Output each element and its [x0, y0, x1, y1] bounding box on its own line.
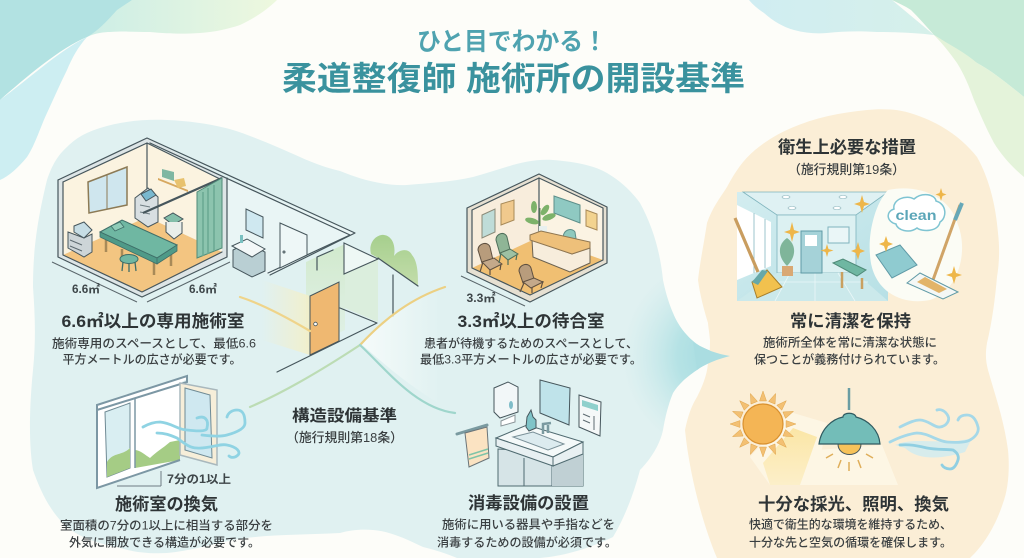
mop — [907, 203, 962, 299]
illustration: wash basin and disinfection — [457, 380, 601, 486]
waiting chairs — [478, 233, 543, 293]
text block: light and ventilation: 快適で衛生的な環境を維持するため、 — [749, 516, 952, 532]
panel: hygiene measures background — [685, 109, 1009, 558]
hand soap — [526, 410, 536, 431]
decorative blob: top left pale cyan — [0, 37, 87, 180]
title: ひと目でわかる！ — [417, 28, 607, 56]
decorative blob: top left teal — [0, 0, 132, 100]
exterior window — [344, 243, 378, 274]
text block: keep clean: 施術所全体を常に清潔な状態に — [763, 334, 937, 350]
decorative blob: top right light green — [934, 35, 1024, 177]
gold sparkles — [784, 188, 962, 284]
door — [310, 282, 339, 355]
dimension lines — [52, 262, 230, 302]
basin counter — [496, 425, 583, 466]
air flow — [890, 410, 978, 469]
text block: keep clean: 保つことが義務付けられています。 — [754, 352, 945, 366]
treatment machine — [135, 188, 158, 227]
text block: treatment room — [52, 312, 256, 366]
connector lines: hub to four items — [240, 287, 455, 413]
text block: disinfection: 施術に用いる器具や手指などを — [442, 516, 615, 532]
wall art — [482, 196, 597, 238]
text block: keep clean: 常に清潔を保持 — [790, 312, 911, 331]
small stool — [164, 213, 183, 239]
interior door — [280, 223, 307, 268]
text block: waiting room — [420, 312, 642, 366]
text block: treatment room: 6.6㎡以上の専用施術室 — [62, 312, 244, 331]
faucet — [543, 423, 551, 434]
illustration: open window — [97, 376, 245, 488]
text block: treatment room: 平方メートルの広さが必要です。 — [62, 352, 242, 366]
window — [88, 167, 127, 213]
text block: waiting room: 3.3㎡以上の待合室 — [458, 312, 604, 331]
central building sketch — [262, 235, 418, 372]
illustration: treatment room — [52, 138, 355, 302]
clean cloud: clean — [896, 207, 936, 223]
curtain rod — [143, 178, 222, 213]
text block: ventilation: 施術室の換気 — [115, 495, 218, 514]
text block: keep clean — [754, 312, 945, 366]
text block: ventilation: 外気に開放できる構造が必要です。 — [69, 534, 260, 550]
text block: ventilation: 室面積の7分の1以上に相当する部分を — [60, 518, 273, 532]
ceiling lights — [782, 196, 847, 210]
text block: light and ventilation: 十分な採光、照明、換気 — [758, 495, 949, 514]
cleaning cloth — [876, 245, 917, 278]
hub label: structural standards: （施行規則第18条） — [286, 430, 403, 445]
dimension label: 3.3㎡ — [466, 292, 496, 305]
plant — [524, 201, 557, 232]
text block: light and ventilation: 十分な先と空気の循環を確保します。 — [749, 534, 952, 550]
curtain — [197, 178, 222, 258]
mirror — [540, 380, 570, 425]
lamp light cone — [800, 445, 898, 485]
hub label: structural standards — [286, 406, 403, 445]
soap dispenser — [494, 382, 518, 426]
arrow: from structure panel to hygiene panel — [693, 342, 730, 370]
heading: hygiene measures: 衛生上必要な措置 — [778, 137, 916, 157]
treatment table — [833, 259, 866, 289]
illustration: clean room — [735, 188, 962, 301]
shelf — [158, 169, 188, 192]
text block: disinfection — [437, 494, 617, 550]
text block: waiting room: 患者が待機するためのスペースとして、 — [424, 336, 638, 350]
wash basin — [232, 235, 265, 277]
sunlight beam — [750, 412, 827, 485]
treatment bed — [100, 220, 177, 275]
wind swirl — [143, 410, 245, 457]
reception desk — [530, 230, 590, 272]
open sash — [180, 383, 217, 465]
dimension label right: 6.6㎡ — [189, 283, 217, 296]
round stool — [120, 254, 138, 272]
sun — [730, 391, 796, 457]
cart — [68, 222, 92, 257]
tree — [370, 235, 418, 286]
notice sign — [579, 395, 601, 436]
decorative blob: top left pale green — [87, 0, 277, 37]
heading: hygiene measures: （施行規則第19条） — [788, 162, 905, 177]
text block: light and ventilation — [749, 495, 952, 550]
decorative blob: top right green — [892, 0, 1024, 97]
decorative blob: top right pale cyan — [749, 0, 934, 35]
opening size label: 7分の1以上 — [167, 472, 232, 486]
towel rail and towel — [457, 425, 489, 467]
wedge highlight between connector lines — [362, 288, 480, 413]
plant — [780, 238, 794, 276]
opening size marker — [117, 471, 161, 486]
text block: treatment room: 施術専用のスペースとして、最低6.6 — [52, 336, 256, 350]
panel: structural standards background — [30, 120, 730, 558]
heading: hygiene measures — [778, 137, 916, 177]
vanity cabinet — [498, 449, 583, 486]
text block: disinfection: 消毒するための設備が必須です。 — [437, 534, 617, 550]
text block: disinfection: 消毒設備の設置 — [468, 494, 589, 513]
title — [282, 28, 745, 97]
dimension label left: 6.6㎡ — [72, 283, 100, 296]
illustration: light and air — [730, 388, 978, 485]
white sparkle bubble — [870, 188, 962, 301]
hub label: structural standards: 構造設備基準 — [292, 406, 397, 425]
text block: ventilation — [60, 495, 273, 550]
pendant lamp — [819, 388, 880, 471]
illustration: waiting room — [461, 174, 607, 306]
wall mirror — [246, 209, 263, 238]
clean cloud — [888, 195, 945, 231]
dimension line — [461, 276, 525, 306]
title: 柔道整復師 施術所の開設基準 — [282, 60, 745, 97]
text block: waiting room: 最低3.3平方メートルの広さが必要です。 — [420, 352, 642, 366]
broom — [735, 218, 782, 298]
